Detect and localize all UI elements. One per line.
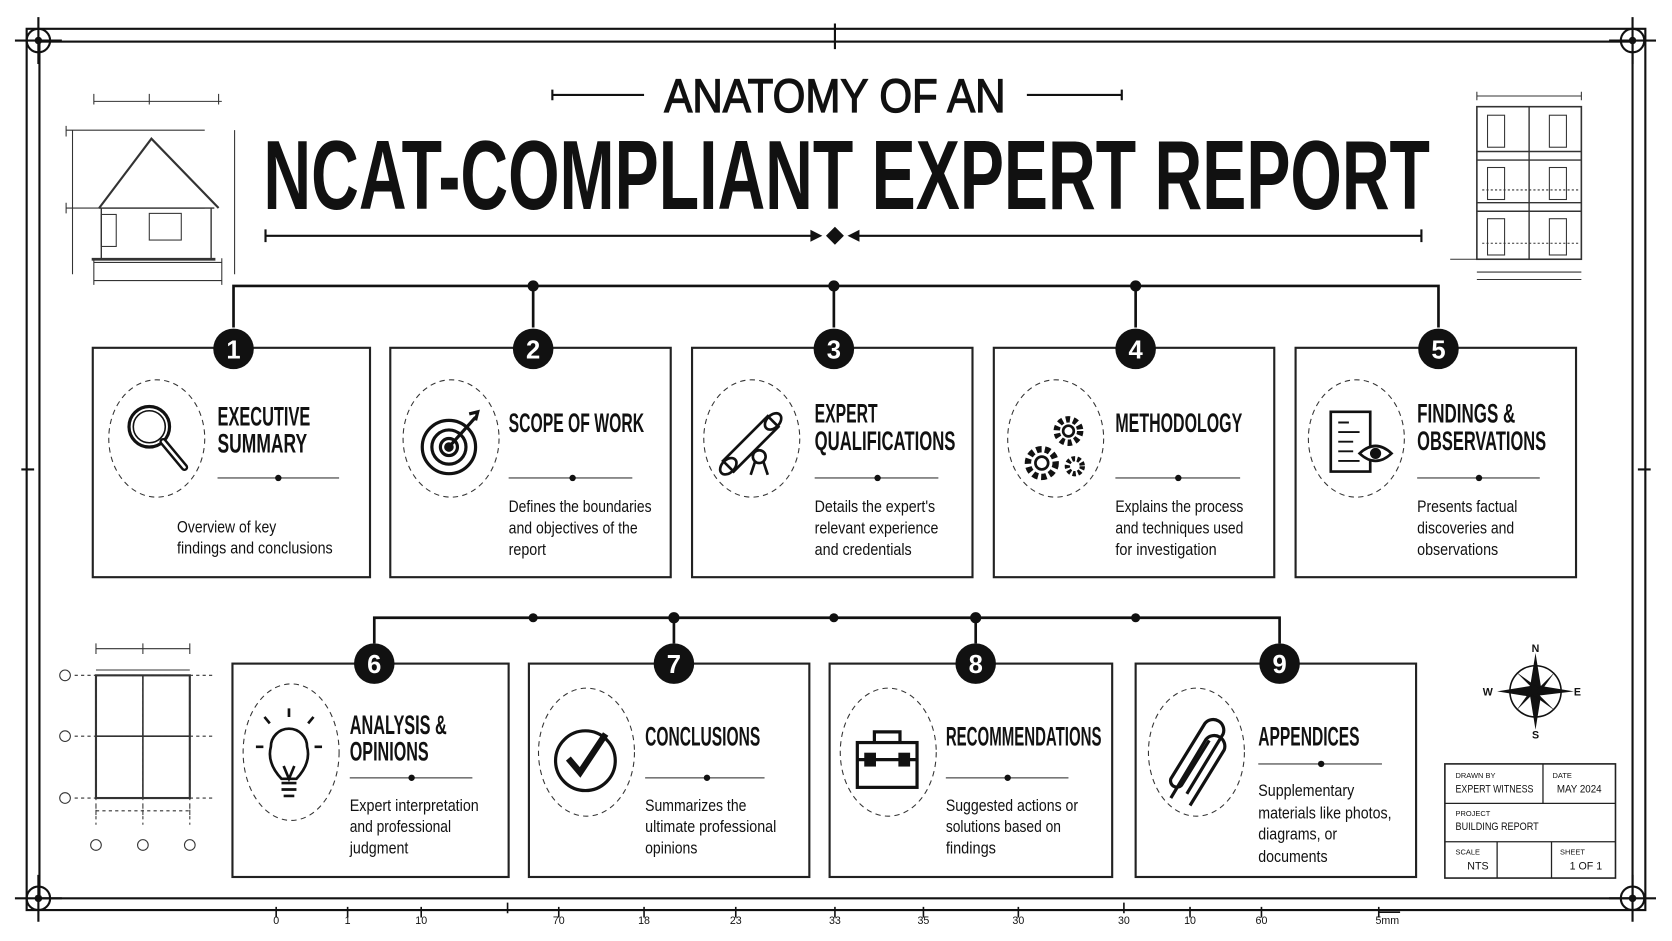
icon: target (422, 412, 478, 474)
card 8: recommendations: findings (946, 839, 996, 858)
card 5: findings (1296, 329, 1576, 577)
drawing: building elevation (1450, 92, 1581, 280)
card 7: conclusions: Summarizes the (645, 796, 746, 815)
card 9: appendices: 9 (1272, 651, 1287, 679)
icon: diploma scroll (717, 410, 784, 478)
card 1: executive summary: SUMMARY (218, 428, 307, 458)
card 7: conclusions: opinions (645, 839, 697, 858)
card 6: analysis: Expert interpretation (350, 796, 479, 815)
card 8: recommendations: RECOMMENDATIONS (946, 722, 1102, 752)
title block: SCALE (1456, 848, 1480, 857)
card 5: findings: 5 (1431, 336, 1446, 364)
scale ruler: 23 (730, 915, 742, 927)
card 3: expert qualifications: 3 (827, 336, 841, 364)
card 8: recommendations: Suggested actions or (946, 796, 1078, 815)
card 6: analysis: OPINIONS (350, 737, 429, 767)
card 3: expert qualifications: Details the expert's (815, 497, 935, 516)
card 9: appendices (1136, 643, 1416, 877)
card 9: appendices: documents (1258, 847, 1328, 866)
drawing: floor plan (60, 643, 213, 850)
card 5: findings: Presents factual (1417, 497, 1517, 516)
card 9: appendices: APPENDICES (1258, 722, 1360, 752)
card 3: expert qualifications: QUALIFICATIONS (815, 426, 955, 456)
card 2: scope of work: SCOPE OF WORK (509, 408, 644, 438)
icon: light bulb (256, 708, 322, 796)
card 8: recommendations: solutions based on (946, 817, 1061, 836)
title block: NTS (1467, 861, 1489, 873)
card 2: scope of work: report (509, 540, 546, 559)
card 5: findings: observations (1417, 540, 1498, 559)
card 4: methodology: and techniques used (1115, 518, 1243, 537)
card 2: scope of work: 2 (526, 336, 540, 364)
icon: compass rose: N (1532, 643, 1539, 655)
icon: document with eye (1331, 412, 1392, 472)
card 3: expert qualifications: EXPERT (815, 398, 878, 428)
icon: compass rose: W (1483, 687, 1494, 699)
title block (1445, 764, 1615, 878)
scale ruler: 30 (1118, 915, 1130, 927)
title block: BUILDING REPORT (1456, 821, 1539, 833)
scale ruler: 60 (1256, 915, 1267, 927)
card 3: expert qualifications: relevant experience (815, 518, 938, 537)
card 1: executive summary: 1 (226, 336, 241, 364)
card 3: expert qualifications (692, 329, 972, 577)
card 1: executive summary: findings and conclusions (177, 539, 333, 558)
card 9: appendices: Supplementary (1258, 781, 1355, 800)
card 2: scope of work: Defines the boundaries (509, 497, 652, 516)
scale ruler: 70 (553, 915, 565, 927)
card 4: methodology: 4 (1129, 336, 1144, 364)
title: ANATOMY OF AN (552, 70, 1122, 122)
title block: 1 OF 1 (1570, 861, 1602, 873)
icon: magnifier (129, 406, 184, 467)
icon: compass rose: S (1532, 729, 1539, 741)
scale ruler: 35 (918, 915, 929, 927)
card 1: executive summary (93, 329, 370, 577)
card 5: findings: FINDINGS & (1417, 398, 1515, 428)
title underline ornament (266, 228, 1421, 243)
icon: paperclip (1171, 720, 1225, 806)
card 4: methodology: METHODOLOGY (1115, 408, 1242, 438)
card 7: conclusions: ultimate professional (645, 817, 776, 836)
card 5: findings: discoveries and (1417, 518, 1514, 537)
drawing: house elevation (66, 94, 235, 285)
icon: compass rose (1483, 643, 1581, 741)
scale ruler: 10 (1184, 915, 1196, 927)
card 7: conclusions: 7 (667, 651, 681, 679)
title block: EXPERT WITNESS (1456, 784, 1533, 796)
title block: PROJECT (1456, 809, 1491, 818)
card 4: methodology: Explains the process (1115, 497, 1243, 516)
card 9: appendices: materials like photos, (1258, 803, 1392, 822)
card 6: analysis: and professional (350, 817, 451, 836)
card 4: methodology: for investigation (1115, 540, 1217, 559)
connector row 2 (374, 613, 1280, 643)
title: ANATOMY OF AN: ANATOMY OF AN (664, 70, 1006, 122)
card 6: analysis: ANALYSIS & (350, 710, 447, 740)
title block: MAY 2024 (1557, 784, 1602, 796)
scale ruler: 30 (1012, 915, 1024, 927)
card 6: analysis (232, 643, 509, 877)
card 1: executive summary: EXECUTIVE (218, 402, 310, 432)
card 5: findings: OBSERVATIONS (1417, 426, 1546, 456)
scale ruler: 5mm (1375, 915, 1399, 927)
card 8: recommendations (830, 643, 1112, 877)
card 6: analysis: judgment (349, 839, 409, 858)
icon: gears (1028, 419, 1082, 477)
title block: SHEET (1560, 848, 1585, 857)
icon: toolbox (857, 732, 917, 787)
card 2: scope of work: and objectives of the (509, 518, 638, 537)
scale ruler: 18 (638, 915, 650, 927)
scale ruler: 33 (829, 915, 841, 927)
card 3: expert qualifications: and credentials (815, 540, 912, 559)
card 4: methodology (994, 329, 1274, 577)
connector row 1 (234, 282, 1438, 328)
card 1: executive summary: Overview of key (177, 517, 277, 536)
card 6: analysis: 6 (367, 651, 381, 679)
scale ruler: 1 (345, 915, 351, 927)
card 7: conclusions (529, 643, 809, 877)
card 8: recommendations: 8 (969, 651, 983, 679)
title block: DATE (1553, 771, 1572, 780)
icon: compass rose: E (1574, 687, 1581, 699)
card 9: appendices: diagrams, or (1258, 825, 1337, 844)
scale ruler: 0 (273, 915, 279, 927)
scale ruler: 10 (415, 915, 427, 927)
title block: DRAWN BY (1456, 771, 1495, 780)
card 2: scope of work (390, 329, 671, 577)
scale ruler (273, 903, 1400, 927)
card 7: conclusions: CONCLUSIONS (645, 722, 760, 752)
icon: check (556, 731, 615, 791)
